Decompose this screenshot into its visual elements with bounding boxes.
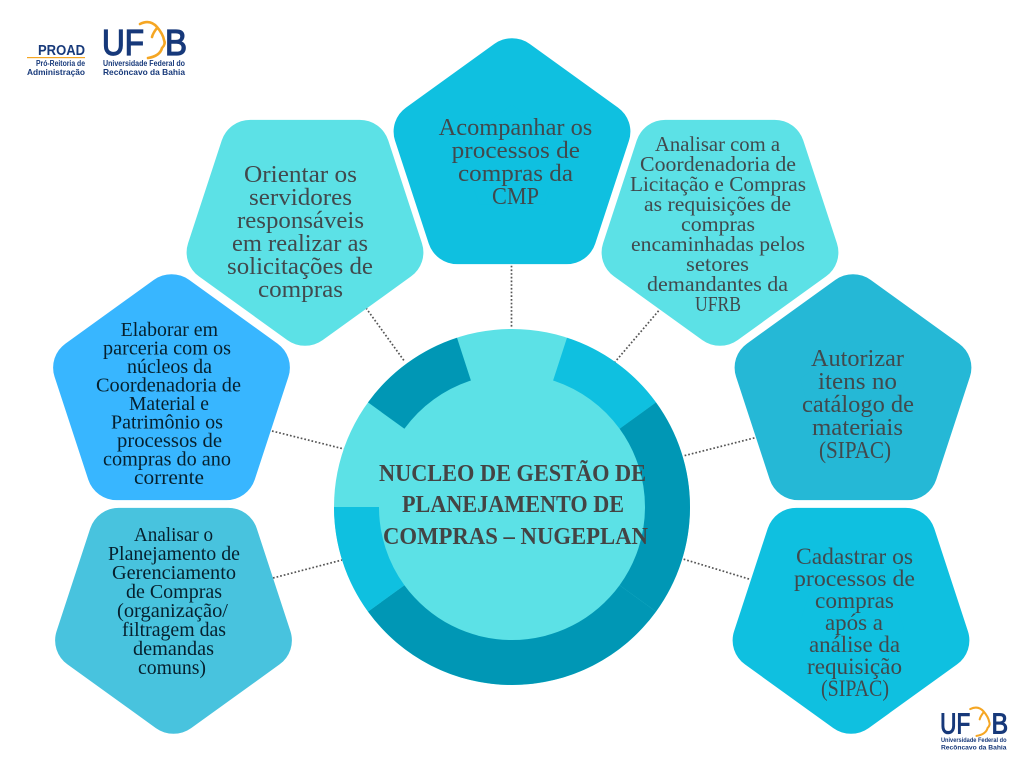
connector: lower right xyxy=(683,559,749,579)
text: Orientar: Orientar os xyxy=(244,162,357,188)
connector: middle left xyxy=(272,431,344,449)
text: Analisar o Planejamento: demandas xyxy=(133,639,214,660)
text: Cadastrar: (SIPAC) xyxy=(821,676,889,701)
title: NUGEPLAN xyxy=(379,461,649,550)
text: Analisar o Planejamento: de Compras xyxy=(126,582,222,603)
central ring diagram xyxy=(334,329,690,685)
logo: UFRB bottom right xyxy=(940,708,1008,751)
text: Cadastrar: Cadastrar os xyxy=(796,544,913,569)
text: Acompanhar: Acompanhar os xyxy=(439,115,592,141)
text: Autorizar: (SIPAC) xyxy=(819,438,891,464)
logo letter: B: B xyxy=(992,709,1008,741)
text: Elaborar: Material e xyxy=(129,394,209,415)
title: NUGEPLAN: NUCLEO DE GESTÃO DE xyxy=(379,461,646,487)
pentagon: lower right xyxy=(763,538,939,704)
text: Analisar o Planejamento: (organização/ xyxy=(117,601,229,622)
text: Elaborar: Elaborar em xyxy=(121,320,218,341)
logo text: Administração: Administração xyxy=(27,67,85,77)
pentagon: upper left xyxy=(217,150,393,316)
ring segment: upper right cyan xyxy=(553,338,656,429)
text: Cadastrar: após a xyxy=(825,610,883,635)
title: NUGEPLAN: COMPRAS – NUGEPLAN xyxy=(383,524,649,550)
text: Analisar com a Coordenadoria: UFRB xyxy=(695,292,741,316)
text: Analisar com a Coordenadoria xyxy=(630,132,806,316)
text: Analisar com a Coordenadoria: encaminhadas pelos xyxy=(631,232,805,256)
logo icon: orange profile xyxy=(140,22,165,58)
pentagon: middle left xyxy=(83,304,260,470)
text: Analisar o Planejamento: filtragem das xyxy=(122,620,226,641)
logo letters: UF: UF xyxy=(102,22,144,63)
text: Orientar: em realizar as xyxy=(232,231,368,257)
text: Orientar xyxy=(227,162,373,303)
connector: top xyxy=(510,262,512,327)
logo text: Recôncavo da Bahia: Recôncavo da Bahia xyxy=(103,67,185,77)
panel: Analisar com a Coordenadoria xyxy=(630,132,808,316)
panel: Orientar xyxy=(217,150,393,316)
text: Analisar com a Coordenadoria: as requisições de xyxy=(644,192,791,216)
connector: middle right xyxy=(683,437,758,456)
text: Acompanhar: CMP xyxy=(492,184,539,210)
ring segment: lower left cyan xyxy=(334,507,404,612)
text: Orientar: responsáveis xyxy=(237,208,364,234)
text: Analisar o Planejamento xyxy=(108,525,240,679)
text: Cadastrar: compras xyxy=(815,588,894,613)
connector: lower left xyxy=(273,560,342,578)
text: Cadastrar xyxy=(794,544,915,701)
text: Acompanhar xyxy=(439,115,592,210)
text: Analisar com a Coordenadoria: demandantes da xyxy=(647,272,789,296)
ring segment: right upper dark xyxy=(620,402,690,507)
text: Analisar com a Coordenadoria: compras xyxy=(681,212,755,236)
text: Acompanhar: compras da xyxy=(458,161,573,187)
text: Analisar o Planejamento: comuns) xyxy=(138,658,206,679)
text: Elaborar: núcleos da xyxy=(127,357,212,378)
text: Elaborar: processos de xyxy=(117,431,222,452)
logo text: Recôncavo da Bahia: Recôncavo da Bahia xyxy=(941,744,1007,751)
text: Analisar o Planejamento: Analisar o xyxy=(134,525,213,546)
text: Acompanhar: processos de xyxy=(452,138,580,164)
panel: Acompanhar xyxy=(424,68,600,234)
pentagon: upper right xyxy=(632,150,808,316)
text: Cadastrar: processos de xyxy=(794,566,915,591)
text: Cadastrar: análise da xyxy=(809,632,900,657)
panel: Analisar o Planejamento xyxy=(85,525,262,704)
logo text: PROAD: PROAD xyxy=(38,43,85,59)
connector: upper right xyxy=(615,308,661,362)
panel: Cadastrar xyxy=(763,538,939,704)
logo: PROAD UFRB top left xyxy=(27,22,187,77)
text: Analisar com a Coordenadoria: Licitação e Compras xyxy=(630,172,806,196)
logo divider line xyxy=(27,57,85,58)
panel: Elaborar xyxy=(83,304,260,489)
text: Autorizar: itens no xyxy=(818,369,897,395)
central light circle xyxy=(334,329,690,685)
logo letter: B: B xyxy=(165,22,187,63)
logo text: Pró-Reitoria de: Pró-Reitoria de xyxy=(36,59,85,68)
text: Autorizar: materiais xyxy=(812,415,903,441)
text: Orientar: servidores xyxy=(249,185,352,211)
text: Orientar: solicitações de xyxy=(227,254,373,280)
logo text: Universidade Federal do: Universidade Federal do xyxy=(103,59,185,68)
title: NUGEPLAN: PLANEJAMENTO DE xyxy=(402,492,624,518)
text: Orientar: compras xyxy=(258,277,343,303)
text: Cadastrar: requisição xyxy=(807,654,902,679)
panel: Autorizar xyxy=(765,304,941,470)
logo text: Universidade Federal do: Universidade Federal do xyxy=(941,737,1007,744)
logo icon: orange profile xyxy=(970,708,990,736)
text: Analisar o Planejamento: Planejamento de xyxy=(108,544,240,565)
text: Elaborar: parceria com os xyxy=(103,338,231,360)
text: Analisar com a Coordenadoria: setores xyxy=(686,252,749,276)
pentagon: top xyxy=(424,68,600,234)
text: Autorizar: Autorizar xyxy=(811,346,904,372)
ring segment: upper left dark xyxy=(368,338,471,429)
text: Elaborar xyxy=(96,320,241,489)
text: Analisar com a Coordenadoria: Analisar com a xyxy=(655,132,781,156)
pentagon: lower left xyxy=(85,538,262,704)
ring segment: right lower dark xyxy=(620,507,690,612)
text: Elaborar: compras do ano xyxy=(103,450,231,470)
pentagon: middle right xyxy=(765,304,941,470)
connector: upper left xyxy=(366,308,405,362)
text: Analisar o Planejamento: Gerenciamento xyxy=(112,563,236,584)
logo letters: UF: UF xyxy=(940,709,970,741)
text: Elaborar: corrente xyxy=(134,468,204,489)
text: Elaborar: Coordenadoria de xyxy=(96,376,241,396)
ring segment: bottom dark xyxy=(368,585,656,685)
text: Analisar com a Coordenadoria: Coordenadoria de xyxy=(640,152,796,176)
text: Autorizar: catálogo de xyxy=(802,392,914,418)
text: Autorizar xyxy=(802,346,914,464)
text: Elaborar: Patrimônio os xyxy=(111,412,223,434)
